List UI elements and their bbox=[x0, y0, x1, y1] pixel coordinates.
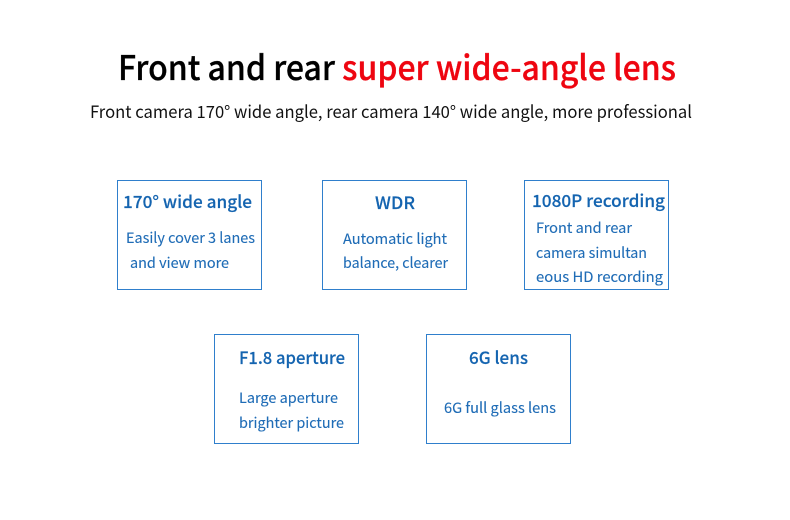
text: balance: balance, clearer bbox=[343, 252, 448, 273]
text: automatic light: Automatic light bbox=[343, 228, 448, 249]
text: eous HD recording: eous HD recording bbox=[536, 266, 663, 287]
text: large aperture: Large aperture bbox=[239, 387, 338, 408]
title: Front and rear super wide-angle lens bbox=[118, 41, 676, 90]
text: 6G full glass lens: 6G full glass lens bbox=[444, 397, 556, 418]
heading: 170 wide angle: 170° wide angle bbox=[123, 188, 252, 213]
panel: F1.8 aperture bbox=[214, 334, 358, 444]
panel: WDR bbox=[322, 180, 466, 290]
text: front and rear: Front and rear bbox=[536, 217, 632, 238]
text: easily cover: Easily cover 3 lanes bbox=[126, 227, 255, 248]
heading: WDR: WDR bbox=[375, 189, 415, 214]
panel: 170 wide angle bbox=[118, 180, 262, 290]
panel: 1080P recording bbox=[524, 180, 668, 290]
panel: 6G lens bbox=[426, 334, 570, 444]
text: view more: and view more bbox=[130, 252, 229, 273]
heading: 6G lens: 6G lens bbox=[469, 344, 528, 369]
text: camera simultan: camera simultan bbox=[536, 242, 647, 263]
text: brighter picture: brighter picture bbox=[239, 412, 344, 433]
subtitle: Front camera 170° wide angle, rear camera 140° wide angle, more professional bbox=[90, 98, 692, 123]
heading: F1.8 aperture: F1.8 aperture bbox=[239, 344, 345, 369]
heading: 1080P recording: 1080P recording bbox=[532, 187, 665, 212]
